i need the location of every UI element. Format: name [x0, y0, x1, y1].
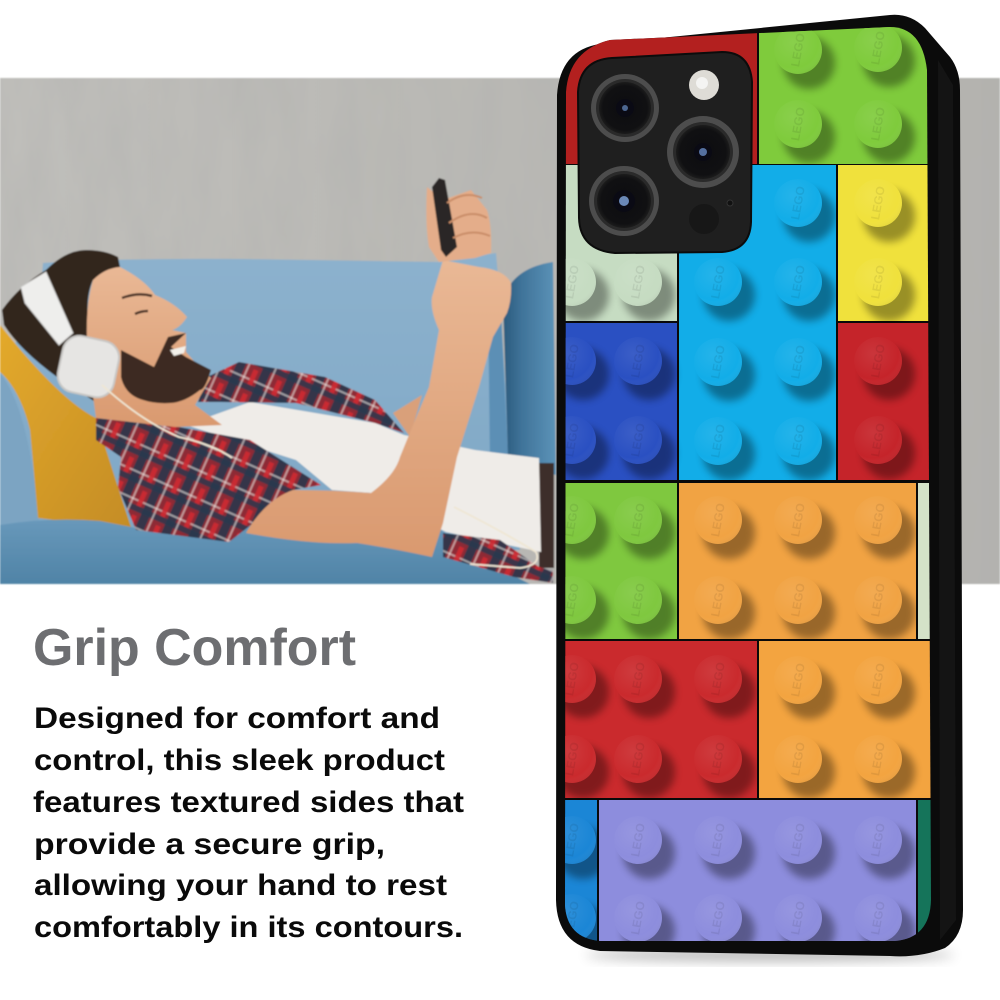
- held smartphone: [432, 178, 457, 257]
- sofa right arm: [503, 262, 556, 475]
- brick: mint: [566, 165, 677, 321]
- rear arm elbow: [393, 395, 422, 437]
- phone drop shadow: [585, 949, 955, 961]
- sofa back shaded edge: [488, 290, 508, 460]
- description text: features textured sides that: [33, 786, 464, 819]
- headphone band: [21, 272, 73, 345]
- phone with lego case: [548, 15, 963, 957]
- hair: [2, 250, 120, 405]
- arm and lower hand: [246, 260, 511, 557]
- brick: dark blue: [566, 323, 680, 480]
- brick: dark green: [918, 800, 931, 942]
- flash: [689, 70, 719, 100]
- brick: green middle: [565, 483, 677, 639]
- lens top left: [591, 74, 659, 142]
- brick: yellow: [838, 165, 931, 321]
- face and neck: [87, 267, 222, 427]
- headphone cable: [102, 385, 537, 568]
- eye and brow: [122, 294, 152, 314]
- brick: pale strip: [918, 483, 931, 639]
- lens bottom left: [589, 166, 659, 236]
- camera island: [578, 52, 752, 253]
- brick: orange middle: [679, 483, 916, 639]
- beard: [121, 333, 211, 403]
- background wall: [0, 78, 1000, 584]
- case body: [556, 15, 963, 956]
- plaid shirt collar: [198, 362, 404, 433]
- description text: control, this sleek product: [34, 744, 445, 777]
- description text: comfortably in its contours.: [34, 911, 463, 944]
- brick: red top: [560, 30, 757, 164]
- mustard pillow: [0, 325, 132, 530]
- brick: green top: [759, 20, 931, 164]
- sensor: [689, 204, 719, 234]
- description text: provide a secure grip,: [34, 828, 385, 861]
- brick: red right: [838, 323, 931, 480]
- description text: Designed for comfort and: [34, 702, 440, 735]
- lego back panel: [548, 20, 935, 957]
- trousers: [539, 463, 554, 568]
- lens right: [667, 116, 739, 188]
- case side highlight: [938, 60, 956, 940]
- sofa back cushion: [0, 253, 520, 550]
- brick: sky blue: [679, 165, 836, 480]
- smile teeth: [170, 346, 186, 356]
- upper hand: [426, 187, 491, 262]
- microphone: [727, 200, 733, 206]
- photo: man on sofa: [0, 78, 1000, 584]
- brick: blue bottom: [565, 800, 597, 941]
- fingers on phone: [447, 195, 490, 238]
- sofa seat cushion: [0, 520, 530, 584]
- heading: Grip Comfort: [33, 619, 356, 677]
- white t-shirt: [186, 402, 541, 552]
- brick: red lower: [548, 641, 757, 798]
- sofa left arm: [0, 373, 39, 530]
- headphone ear cup: [55, 333, 122, 400]
- brick: orange lower: [759, 641, 931, 798]
- description text: allowing your hand to rest: [34, 869, 447, 902]
- plaid shirt sleeve: [96, 418, 321, 542]
- description text: [33, 702, 464, 944]
- brick: purple: [599, 800, 916, 941]
- plaid shirt hem: [443, 533, 553, 583]
